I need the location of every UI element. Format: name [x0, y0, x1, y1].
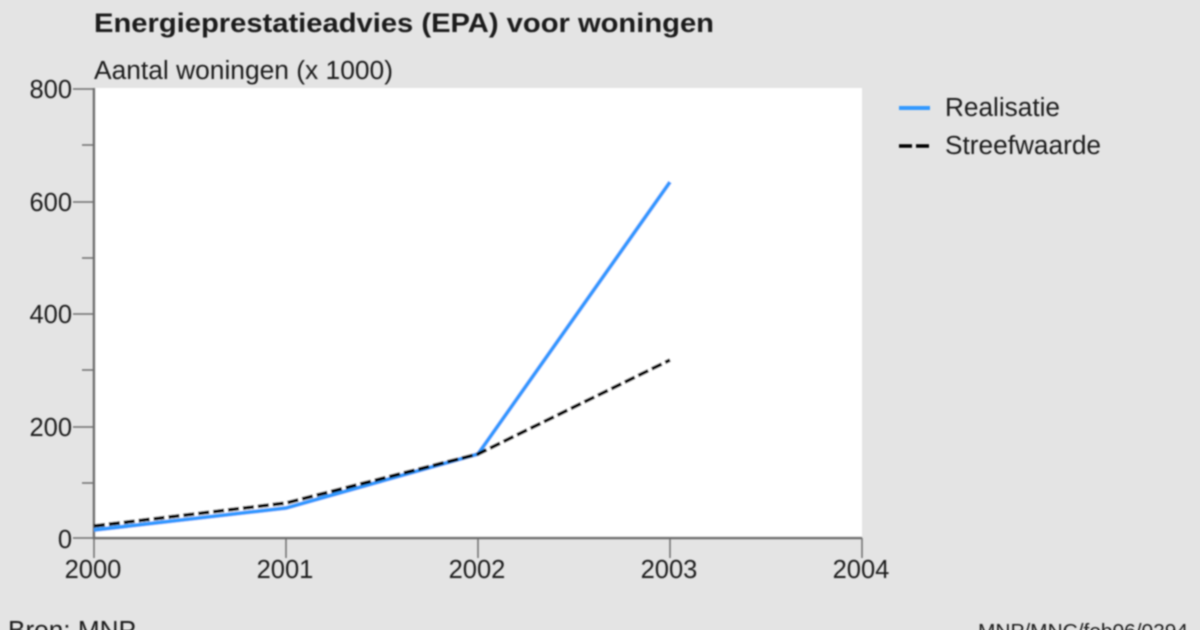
y axis labels: [29, 76, 72, 554]
x axis labels: [65, 556, 889, 584]
x axis labels: 2000: [65, 556, 121, 584]
title: Energieprestatieadvies (EPA) voor woningen: [94, 8, 714, 38]
y axis labels: 400: [29, 301, 72, 329]
y axis labels: 200: [29, 414, 72, 442]
plot area: [94, 88, 862, 538]
legend: [899, 94, 1101, 160]
y axis labels: 0: [58, 526, 72, 554]
y axis unit label: Aantal woningen (x 1000): [94, 57, 393, 85]
chart: [29, 76, 889, 584]
line: Realisatie: [94, 182, 670, 530]
y axis labels: 800: [29, 76, 72, 104]
x axis labels: 2003: [641, 556, 697, 584]
axes and ticks: [73, 88, 862, 558]
y axis labels: 600: [29, 189, 72, 217]
legend item: Streefwaarde: Streefwaarde: [945, 132, 1101, 160]
legend item: Realisatie: Realisatie: [945, 94, 1060, 122]
line: Streefwaarde: [94, 360, 670, 526]
x axis labels: 2002: [449, 556, 505, 584]
x axis labels: 2004: [833, 556, 889, 584]
x axis labels: 2001: [257, 556, 313, 584]
